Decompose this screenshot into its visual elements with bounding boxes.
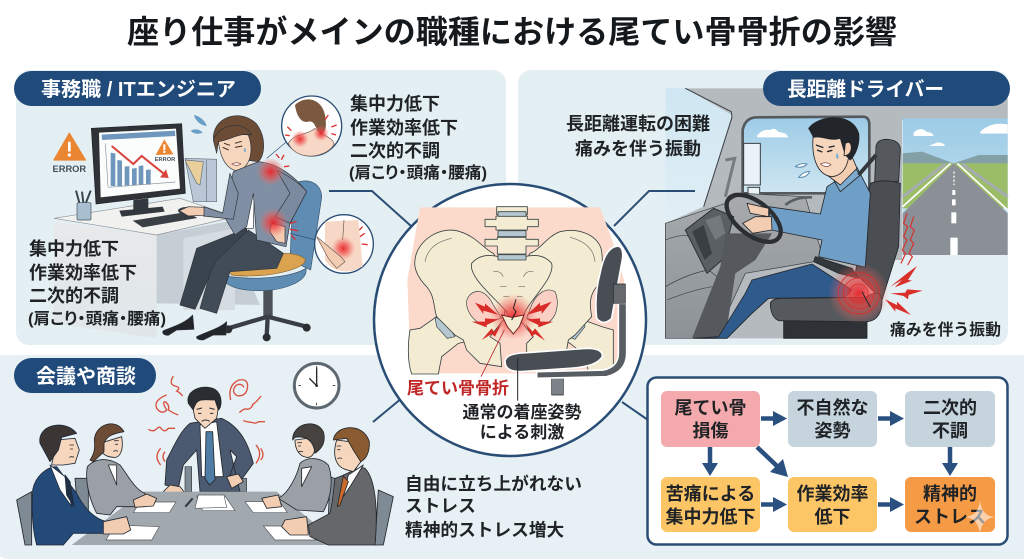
box: secondary problems: 不調 — [932, 421, 968, 441]
box: posture: 姿勢 — [814, 421, 850, 441]
error warning — [52, 133, 86, 174]
flow chart — [648, 378, 1008, 544]
badge: meetings — [14, 358, 156, 393]
windshield — [665, 88, 739, 228]
wall clock — [294, 363, 339, 408]
monitor — [91, 124, 185, 217]
desk — [54, 198, 260, 338]
box: mental stress: ストレス — [914, 507, 986, 527]
driver — [694, 118, 876, 338]
panel: meetings — [0, 355, 1024, 559]
illustration: office desk and worried woman — [52, 96, 373, 341]
text: upper effects: 二次的不調 — [350, 141, 440, 161]
monitor: ERROR — [155, 157, 175, 163]
text: lower effects: 二次的不調 — [29, 286, 119, 306]
text: meeting stress: ストレス — [405, 496, 476, 516]
pelvic cavity gaps — [467, 290, 557, 323]
pink backdrop — [407, 207, 624, 373]
keyboard and mouse — [133, 207, 197, 227]
fracture glow — [490, 293, 537, 340]
fracture pointer — [481, 330, 504, 377]
connector lines — [329, 191, 695, 422]
badge: meetings: 会議や商談 — [36, 365, 136, 388]
box: efficiency: 低下 — [814, 507, 850, 527]
label: seated posture: による刺激 — [480, 423, 564, 442]
text: lower effects: (肩こり・頭痛・腰痛) — [28, 309, 166, 328]
pelvis — [415, 230, 602, 367]
box: mental stress — [905, 477, 995, 532]
pen cup — [76, 191, 91, 220]
box: mental stress: 精神的 — [923, 484, 977, 504]
box: coccyx injury: 損傷 — [692, 421, 728, 441]
text: upper effects: (肩こり・頭痛・腰痛) — [349, 163, 487, 182]
cab interior — [665, 88, 1008, 338]
box: coccyx injury — [661, 391, 760, 447]
error warning: ERROR — [52, 164, 86, 174]
box: concentration: 集中力低下 — [666, 507, 756, 527]
badge: driver — [763, 71, 1010, 106]
back chairs — [185, 467, 247, 492]
arrows — [702, 411, 958, 512]
anatomy illustration — [407, 207, 627, 401]
woman right — [262, 424, 393, 545]
hip joints — [435, 317, 585, 339]
text: driver difficulty: 痛みを伴う振動 — [575, 139, 701, 159]
box: efficiency — [788, 477, 877, 532]
text: upper effects: 作業効率低下 — [350, 118, 458, 138]
illustration: truck cab and driver — [665, 88, 1008, 338]
man right — [282, 428, 376, 545]
pain spots — [257, 154, 298, 240]
text: lower effects — [28, 239, 166, 328]
standing man — [162, 387, 253, 497]
text: painful vibration: 痛みを伴う振動 — [890, 320, 1001, 339]
label: seated posture — [462, 402, 582, 442]
vibration and pain marks — [828, 213, 923, 324]
stress squiggles — [148, 376, 265, 465]
road view — [903, 118, 1008, 255]
binders — [185, 158, 217, 202]
box: coccyx injury: 尾てい骨 — [674, 398, 746, 418]
woman left — [17, 424, 157, 545]
label: fracture: 尾てい骨骨折 — [407, 379, 509, 398]
spine — [485, 207, 538, 260]
pain bolts — [472, 302, 553, 341]
badge: office — [14, 71, 261, 106]
box: secondary problems — [905, 391, 995, 447]
box: secondary problems: 二次的 — [923, 398, 977, 418]
seat pointer — [516, 358, 519, 401]
sweat drops — [795, 164, 810, 177]
text: lower effects: 集中力低下 — [29, 239, 119, 259]
badge: driver: 長距離ドライバー — [787, 78, 944, 101]
panel: office worker — [14, 70, 506, 345]
inset: lower back pain — [290, 215, 373, 273]
office chair — [222, 181, 322, 341]
panel: driver — [518, 70, 1010, 345]
text: meeting stress: 精神的ストレス増大 — [405, 520, 565, 540]
inset: neck pain — [267, 96, 342, 158]
text: upper effects: 集中力低下 — [350, 94, 440, 114]
sweat drops — [191, 115, 207, 134]
text: driver difficulty — [566, 114, 710, 159]
watermark sparkle — [965, 501, 995, 533]
text: driver difficulty: 長距離運転の困難 — [566, 114, 710, 134]
driver seat — [770, 139, 900, 338]
title: 座り仕事がメインの職種における尾てい骨骨折の影響 — [127, 14, 897, 50]
text: lower effects: 作業効率低下 — [29, 263, 137, 283]
box: posture: 不自然な — [796, 397, 868, 418]
woman — [163, 116, 307, 340]
box: posture — [788, 391, 877, 447]
badge: office: 事務職 / ITエンジニア — [41, 78, 236, 101]
central circle: coccyx fracture — [374, 184, 646, 456]
coccyx — [502, 315, 524, 334]
text: meeting stress: 自由に立ち上がれない — [405, 473, 582, 494]
text: meeting stress — [405, 473, 582, 540]
man left — [32, 425, 131, 545]
box: concentration — [661, 477, 760, 532]
illustration: meeting room — [17, 363, 393, 545]
label: seated posture: 通常の着座姿勢 — [462, 402, 582, 422]
conference table — [72, 492, 340, 545]
box: concentration: 苦痛による — [666, 484, 755, 504]
femurs — [408, 317, 613, 374]
chair — [505, 246, 627, 395]
text: upper effects — [349, 94, 487, 182]
box: efficiency: 作業効率 — [796, 484, 868, 504]
